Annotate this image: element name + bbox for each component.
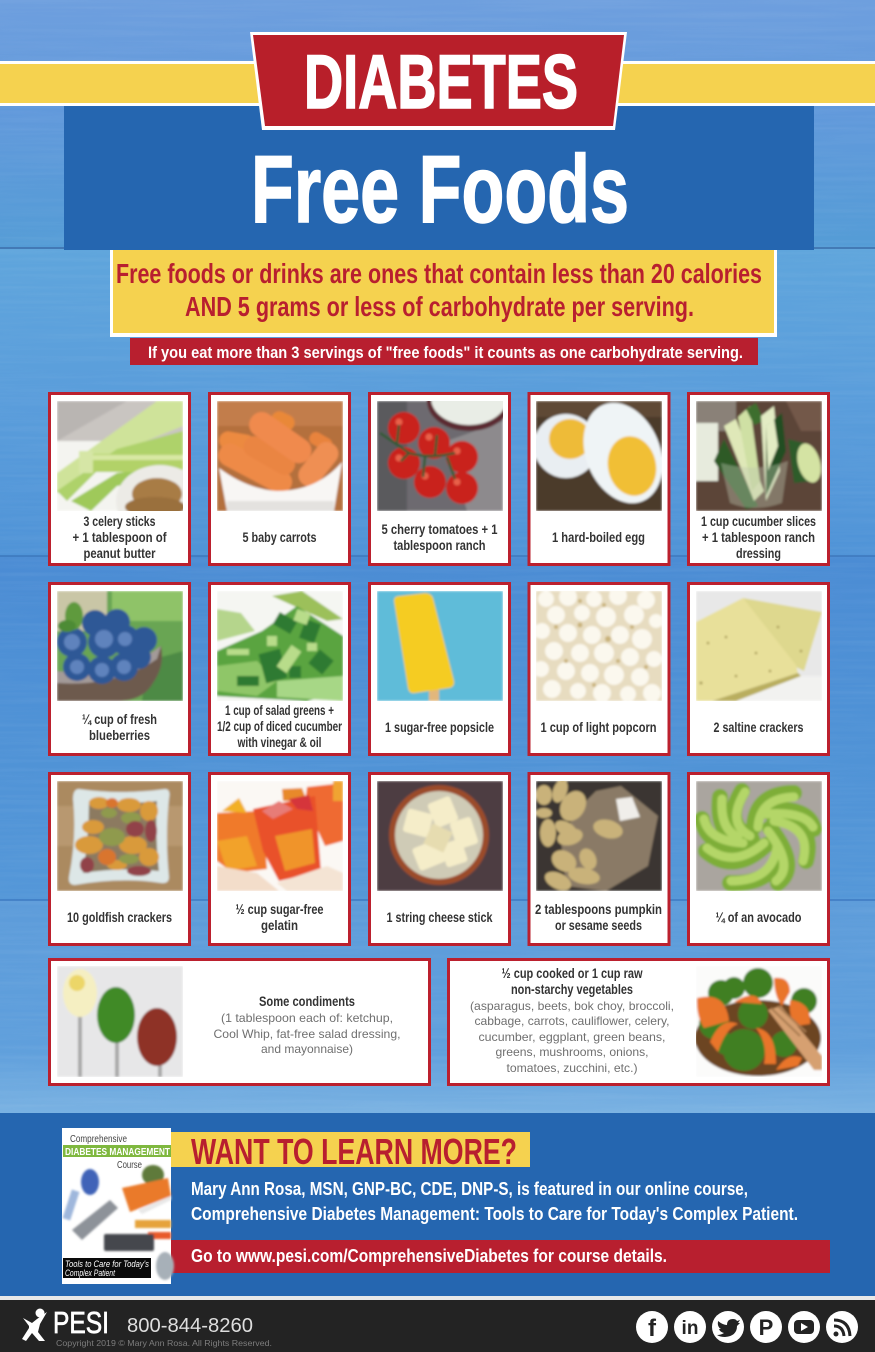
- photo: sugar-free gelatin cups: [217, 781, 343, 891]
- caption: 3 celery sticks: [84, 513, 156, 529]
- title: Free Foods: Free Foods: [251, 136, 629, 243]
- caption: 1 sugar-free popsicle: [385, 719, 494, 735]
- icon: youtube: [788, 1311, 820, 1343]
- caption: 1/2 cup of diced cucumber: [217, 718, 342, 734]
- caption: tablespoon ranch: [394, 537, 486, 553]
- caption: + 1 tablespoon of: [72, 529, 167, 545]
- course book cover: [62, 1128, 174, 1284]
- yellow definition box: AND 5 grams or less of carbohydrate per serving.: [185, 291, 694, 322]
- text: vegetables description: cucumber, eggplant, green beans,: [478, 1030, 666, 1044]
- photo: tomatoes and ranch: [377, 401, 503, 511]
- phone number: 800-844-8260: [127, 1315, 253, 1337]
- caption: [236, 901, 324, 933]
- photo: pumpkin seeds on brown paper: [536, 781, 662, 891]
- text: vegetables description: cabbage, carrots, cauliflower, celery,: [474, 1014, 670, 1028]
- caption: 1 cup of light popcorn: [540, 719, 656, 735]
- card: condiments: [50, 960, 430, 1084]
- course description: [191, 1179, 798, 1224]
- caption: ¼ of an avocado: [716, 909, 802, 925]
- photo: popcorn: [536, 591, 662, 701]
- text: condiments description: Cool Whip, fat-free salad dressing,: [214, 1027, 400, 1041]
- photo: goldfish crackers in white dish: [57, 781, 183, 891]
- course book cover: Comprehensive: [70, 1134, 127, 1145]
- yellow header stripe: [0, 61, 875, 106]
- caption: [217, 702, 342, 750]
- card: non-starchy vegetables: [448, 960, 828, 1084]
- red link bar: [171, 1240, 830, 1273]
- icon: twitter: [712, 1311, 744, 1343]
- icon: pinterest: [750, 1311, 782, 1343]
- photo: string cheese in bowl: [377, 781, 503, 891]
- caption: 1 cup of salad greens +: [225, 702, 334, 718]
- text: condiments description: and mayonnaise): [261, 1042, 353, 1056]
- course book cover: Course: [117, 1160, 142, 1171]
- photo: bowl of broccoli and carrots: [696, 966, 822, 1077]
- blue title panel: [64, 106, 814, 250]
- caption: + 1 tablespoon ranch: [702, 529, 815, 545]
- panel: want to learn more: [0, 1113, 875, 1296]
- course description: Mary Ann Rosa, MSN, GNP-BC, CDE, DNP-S, is featured in our online course,: [191, 1179, 748, 1199]
- text: vegetables description: tomatoes, zucchini, etc.): [506, 1061, 638, 1075]
- card: cherry tomatoes: [370, 371, 511, 564]
- card: saltines: [688, 584, 828, 754]
- photo: saltine crackers: [696, 591, 822, 701]
- photo: celery and peanut butter: [57, 401, 183, 511]
- caption: peanut butter: [84, 545, 156, 561]
- course book cover: DIABETES MANAGEMENT: [65, 1147, 170, 1158]
- text: vegetables description: [470, 965, 674, 1075]
- caption: or sesame seeds: [555, 917, 642, 933]
- card: cucumber: [688, 394, 828, 564]
- caption: dressing: [736, 545, 781, 561]
- caption: gelatin: [261, 917, 298, 933]
- caption: [382, 521, 498, 553]
- course book cover: Tools to Care for Today's: [65, 1259, 149, 1269]
- photo: blueberries in wooden bowl: [57, 591, 183, 701]
- icon: linkedin: [674, 1311, 706, 1343]
- card: string cheese: [370, 774, 510, 944]
- caption: blueberries: [89, 727, 150, 743]
- red note strip: If you eat more than 3 servings of "free foods" it counts as one carbohydrate serving.: [148, 343, 743, 362]
- icon: facebook: f: [648, 1315, 657, 1342]
- icon: linkedin: in: [682, 1318, 698, 1339]
- card: seeds: [529, 774, 669, 944]
- card: celery: [50, 394, 204, 564]
- card: goldfish: [50, 774, 190, 944]
- photo: cucumber slices in glass with ranch: [696, 401, 822, 511]
- photo: salad greens with cucumber: [217, 591, 343, 701]
- text: condiments description: [214, 993, 400, 1056]
- card: egg: [529, 391, 677, 564]
- photo: baby carrots in white cup: [217, 401, 343, 511]
- heading strip: WANT TO LEARN MORE?: WANT TO LEARN MORE?: [191, 1131, 517, 1172]
- caption: [535, 901, 662, 933]
- yellow definition box: [110, 250, 777, 337]
- red banner: DIABETES: DIABETES: [304, 40, 578, 125]
- caption: ½ cup sugar-free: [236, 901, 324, 917]
- caption: 1 hard-boiled egg: [552, 529, 645, 545]
- text: vegetables description: (asparagus, beets, bok choy, broccoli,: [470, 999, 674, 1013]
- course book cover: Complex Patient: [65, 1268, 115, 1278]
- caption: ¼ cup of fresh: [82, 711, 157, 727]
- card: gelatin: [210, 774, 350, 944]
- logo text: PESI: PESI: [53, 1305, 109, 1340]
- copyright: Copyright 2019 © Mary Ann Rosa. All Rights Reserved.: [56, 1338, 272, 1348]
- card: avocado: [688, 774, 828, 944]
- caption: [72, 513, 167, 561]
- caption: [82, 711, 157, 743]
- red banner: DIABETES: [250, 32, 627, 130]
- icon: facebook: [636, 1311, 668, 1343]
- caption: 2 saltine crackers: [714, 719, 804, 735]
- caption: [701, 513, 816, 561]
- photo: spoons of condiments: [57, 966, 183, 1077]
- icon: pinterest: P: [759, 1315, 773, 1340]
- social icons: [636, 1311, 858, 1343]
- text: condiments description: Some condiments: [259, 993, 355, 1009]
- caption: 1 string cheese stick: [386, 909, 493, 925]
- caption: 5 baby carrots: [242, 529, 317, 545]
- icon: PESI figure logo: [22, 1308, 47, 1341]
- text: vegetables description: greens, mushrooms, onions,: [496, 1045, 648, 1059]
- text: vegetables description: non-starchy vegetables: [511, 981, 633, 997]
- card: popcorn: [529, 584, 669, 754]
- photo: avocado slices: [696, 781, 822, 891]
- caption: with vinegar & oil: [237, 734, 322, 750]
- red note strip: [130, 338, 758, 365]
- photo: hard-boiled egg: [536, 401, 662, 511]
- icon: rss: [826, 1311, 858, 1343]
- text: vegetables description: ½ cup cooked or 1 cup raw: [502, 965, 643, 981]
- card: salad: [210, 584, 350, 754]
- caption: 2 tablespoons pumpkin: [535, 901, 662, 917]
- caption: 10 goldfish crackers: [67, 909, 172, 925]
- text: condiments description: (1 tablespoon each of: ketchup,: [221, 1011, 393, 1025]
- footer bar: [0, 1296, 875, 1352]
- caption: 5 cherry tomatoes + 1: [382, 521, 498, 537]
- card: carrots: [210, 394, 350, 564]
- red link bar: Go to www.pesi.com/ComprehensiveDiabetes for course details.: [191, 1246, 667, 1266]
- card: blueberries: [50, 584, 190, 754]
- card: popsicle: [370, 584, 510, 754]
- caption: 1 cup cucumber slices: [701, 513, 816, 529]
- photo: yellow popsicle: [377, 591, 503, 701]
